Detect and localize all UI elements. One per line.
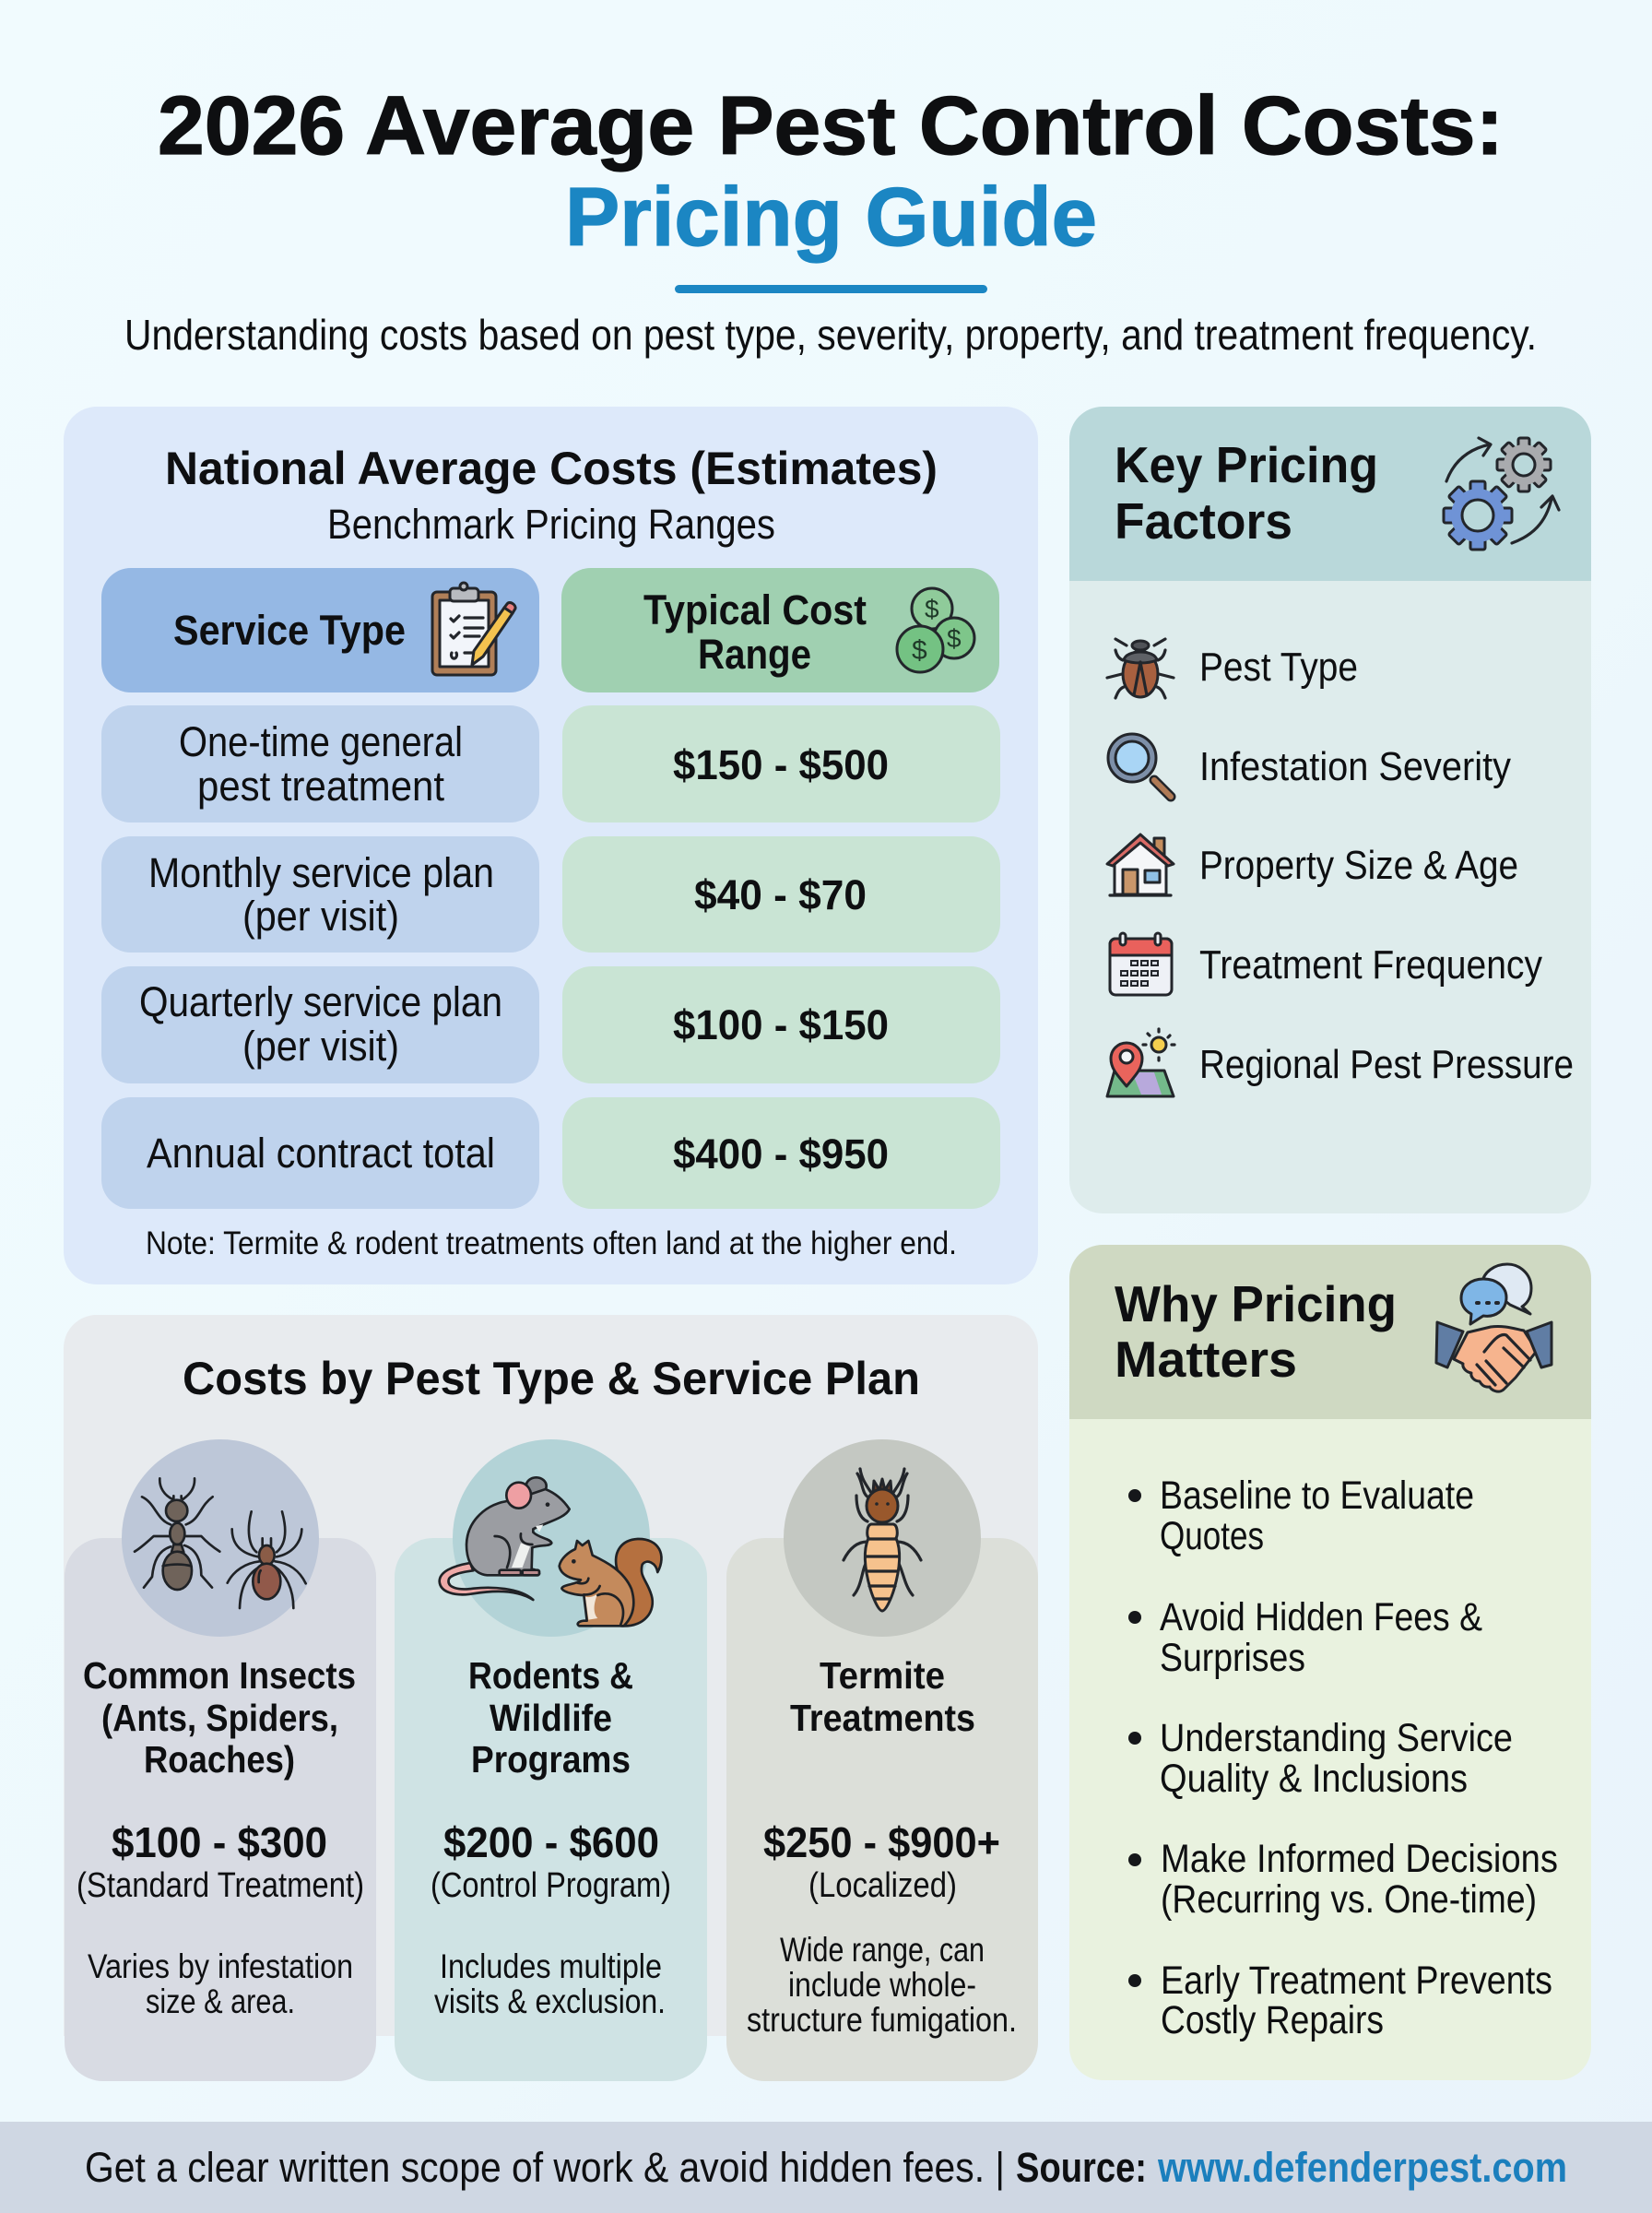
row: monthly service plan	[101, 836, 1000, 953]
card title: common insects: (Ants, Spiders,	[101, 1697, 338, 1739]
price: rodents and wildlife: $200 - $600	[443, 1818, 659, 1866]
icon: gears with arrows	[1444, 438, 1559, 550]
row: annual contract total: $400 - $950	[673, 1130, 889, 1178]
card title: termite treatments: Termite	[820, 1654, 945, 1697]
heading: why pricing matters: Why Pricing	[1115, 1275, 1397, 1332]
note: common insects: Varies by infestation	[88, 1947, 353, 1985]
factor: treatment frequency	[1110, 933, 1542, 995]
icon: calendar	[1110, 933, 1172, 995]
factor: infestation severity	[1108, 734, 1511, 797]
bullet list	[1128, 1473, 1558, 2042]
note: termite treatments: Wide range, can	[780, 1931, 985, 1969]
card: rodents and wildlife	[395, 1439, 707, 2081]
bullet: make informed decisions: (Recurring vs. One-time)	[1161, 1877, 1537, 1922]
subheading: benchmark pricing ranges: Benchmark Pricing Ranges	[327, 501, 775, 548]
bullet: understanding service quality: Understanding Service	[1160, 1716, 1513, 1760]
price: common insects	[77, 1818, 364, 1905]
row: one-time general pest treatment: pest treatment	[197, 763, 444, 810]
bullet: baseline to evaluate quotes: Quotes	[1160, 1514, 1264, 1558]
note: rodents and wildlife: visits & exclusion.	[434, 1982, 666, 2020]
card title: rodents and wildlife: Programs	[471, 1738, 631, 1781]
price: termite treatments: (Localized)	[808, 1866, 957, 1905]
note: common insects: size & area.	[146, 1982, 295, 2020]
factor: infestation severity: Infestation Severity	[1199, 744, 1511, 789]
bullet: early treatment: Costly Repairs	[1161, 1998, 1384, 2042]
card: termite treatments	[726, 1439, 1038, 2081]
factor: treatment frequency: Treatment Frequency	[1199, 942, 1542, 988]
icon: handshake with speech bubbles	[1436, 1264, 1552, 1391]
row: one-time general pest treatment: $150 - $500	[673, 741, 889, 788]
bullet: understanding service quality	[1128, 1716, 1513, 1801]
note: termite treatments: structure fumigation.	[747, 2001, 1017, 2039]
footer text: Source:	[1016, 2144, 1147, 2191]
heading: national average costs: National Average Costs (Estimates)	[165, 443, 938, 494]
panel: costs by pest type	[64, 1315, 1038, 2081]
footer text: Get a clear written scope of work & avoid hidden fees. |	[85, 2144, 1005, 2191]
card title: rodents and wildlife: Wildlife	[490, 1697, 612, 1739]
card title: common insects: Roaches)	[144, 1738, 295, 1781]
row: annual contract total	[101, 1097, 1000, 1209]
panel: key pricing factors	[1069, 407, 1591, 1213]
note: rodents and wildlife: Includes multiple	[440, 1947, 662, 1985]
card: common insects	[65, 1439, 376, 2081]
price: rodents and wildlife: (Control Program)	[431, 1866, 671, 1905]
price: termite treatments	[763, 1818, 1000, 1905]
note: termite treatments: include whole-	[788, 1966, 976, 2004]
row: quarterly service plan: Quarterly service plan	[139, 978, 502, 1025]
card title: common insects	[83, 1654, 356, 1781]
icon: coins	[897, 588, 974, 672]
factor: pest type	[1107, 639, 1358, 698]
bullet: make informed decisions: Make Informed Decisions	[1161, 1837, 1558, 1881]
footer text: www.defenderpest.com	[1157, 2144, 1567, 2191]
heading: key pricing factors: Key Pricing	[1115, 436, 1378, 493]
row: one-time general pest treatment: One-time general	[179, 718, 463, 765]
icon: clipboard	[432, 583, 515, 675]
factor: property size and age	[1107, 834, 1518, 895]
factor: pest type: Pest Type	[1199, 645, 1358, 690]
panel: why pricing matters	[1069, 1245, 1591, 2080]
row: one-time general pest treatment	[101, 705, 1000, 822]
heading: why pricing matters	[1115, 1275, 1397, 1388]
bullet: avoid hidden fees: Surprises	[1160, 1636, 1305, 1680]
row: monthly service plan: Monthly service plan	[148, 849, 494, 896]
footer bar	[0, 2122, 1652, 2213]
note: termite treatments	[747, 1931, 1017, 2039]
factor: regional pest pressure: Regional Pest Pressure	[1199, 1042, 1574, 1087]
bullet: baseline to evaluate quotes: Baseline to Evaluate	[1160, 1473, 1474, 1518]
card title: termite treatments: Treatments	[790, 1697, 975, 1739]
title: 2026 Average Pest Control Costs:	[158, 80, 1504, 172]
heading: costs by pest type: Costs by Pest Type & Service Plan	[183, 1353, 920, 1404]
card title: rodents and wildlife	[468, 1654, 633, 1781]
bullet: understanding service quality: Quality & Inclusions	[1160, 1757, 1468, 1801]
factor: regional pest pressure	[1107, 1029, 1574, 1096]
table header: typical cost range: Range	[698, 631, 811, 678]
row: monthly service plan: $40 - $70	[694, 871, 867, 918]
bullet: early treatment	[1128, 1959, 1552, 2042]
icon: magnifying glass	[1108, 734, 1171, 797]
note: rodents and wildlife	[434, 1947, 666, 2020]
title	[158, 80, 1504, 264]
icon circle: ant and spider	[122, 1439, 319, 1637]
table header: service type	[101, 568, 539, 692]
card title: common insects: Common Insects	[83, 1654, 356, 1697]
row: monthly service plan: (per visit)	[242, 893, 399, 940]
bullet: avoid hidden fees: Avoid Hidden Fees &	[1160, 1595, 1482, 1639]
panel: national average costs	[64, 407, 1038, 1284]
heading: why pricing matters: Matters	[1115, 1331, 1297, 1388]
icon circle: mouse and squirrel	[440, 1439, 661, 1637]
price: common insects: $100 - $300	[112, 1818, 327, 1866]
note: common insects	[88, 1947, 353, 2020]
icon: coins: $	[925, 595, 939, 623]
row: annual contract total: Annual contract total	[147, 1130, 495, 1177]
row: quarterly service plan: $100 - $150	[673, 1001, 889, 1048]
icon: map pin with sun	[1107, 1029, 1174, 1096]
card title: termite treatments	[790, 1654, 975, 1739]
heading: key pricing factors: Factors	[1115, 492, 1292, 550]
bullet: make informed decisions	[1128, 1837, 1558, 1922]
heading: key pricing factors	[1115, 436, 1378, 550]
table header: service type: Service Type	[173, 607, 406, 654]
note: Note: Termite & rodent treatments often land at the higher end.	[146, 1225, 957, 1261]
factor: property size and age: Property Size & Age	[1199, 843, 1518, 888]
table header: typical cost range	[561, 568, 999, 692]
row: quarterly service plan	[101, 966, 1000, 1083]
icon: coins: $	[912, 635, 927, 666]
icon: house	[1107, 834, 1174, 895]
icon: coins: $	[947, 624, 962, 653]
price: rodents and wildlife	[431, 1818, 671, 1905]
price: common insects: (Standard Treatment)	[77, 1866, 364, 1905]
row: quarterly service plan: (per visit)	[242, 1023, 399, 1070]
icon: beetle	[1107, 639, 1174, 698]
card title: rodents and wildlife: Rodents &	[468, 1654, 633, 1697]
bullet: early treatment: Early Treatment Prevents	[1161, 1959, 1552, 2003]
bullet: avoid hidden fees	[1128, 1595, 1482, 1680]
title underline	[675, 285, 987, 293]
price: termite treatments: $250 - $900+	[763, 1818, 1000, 1866]
bullet: baseline to evaluate quotes	[1128, 1473, 1474, 1558]
icon circle: termite	[784, 1439, 981, 1637]
table header: typical cost range: Typical Cost	[643, 586, 867, 633]
footer text	[85, 2144, 1567, 2191]
title: Pricing Guide	[565, 172, 1097, 264]
